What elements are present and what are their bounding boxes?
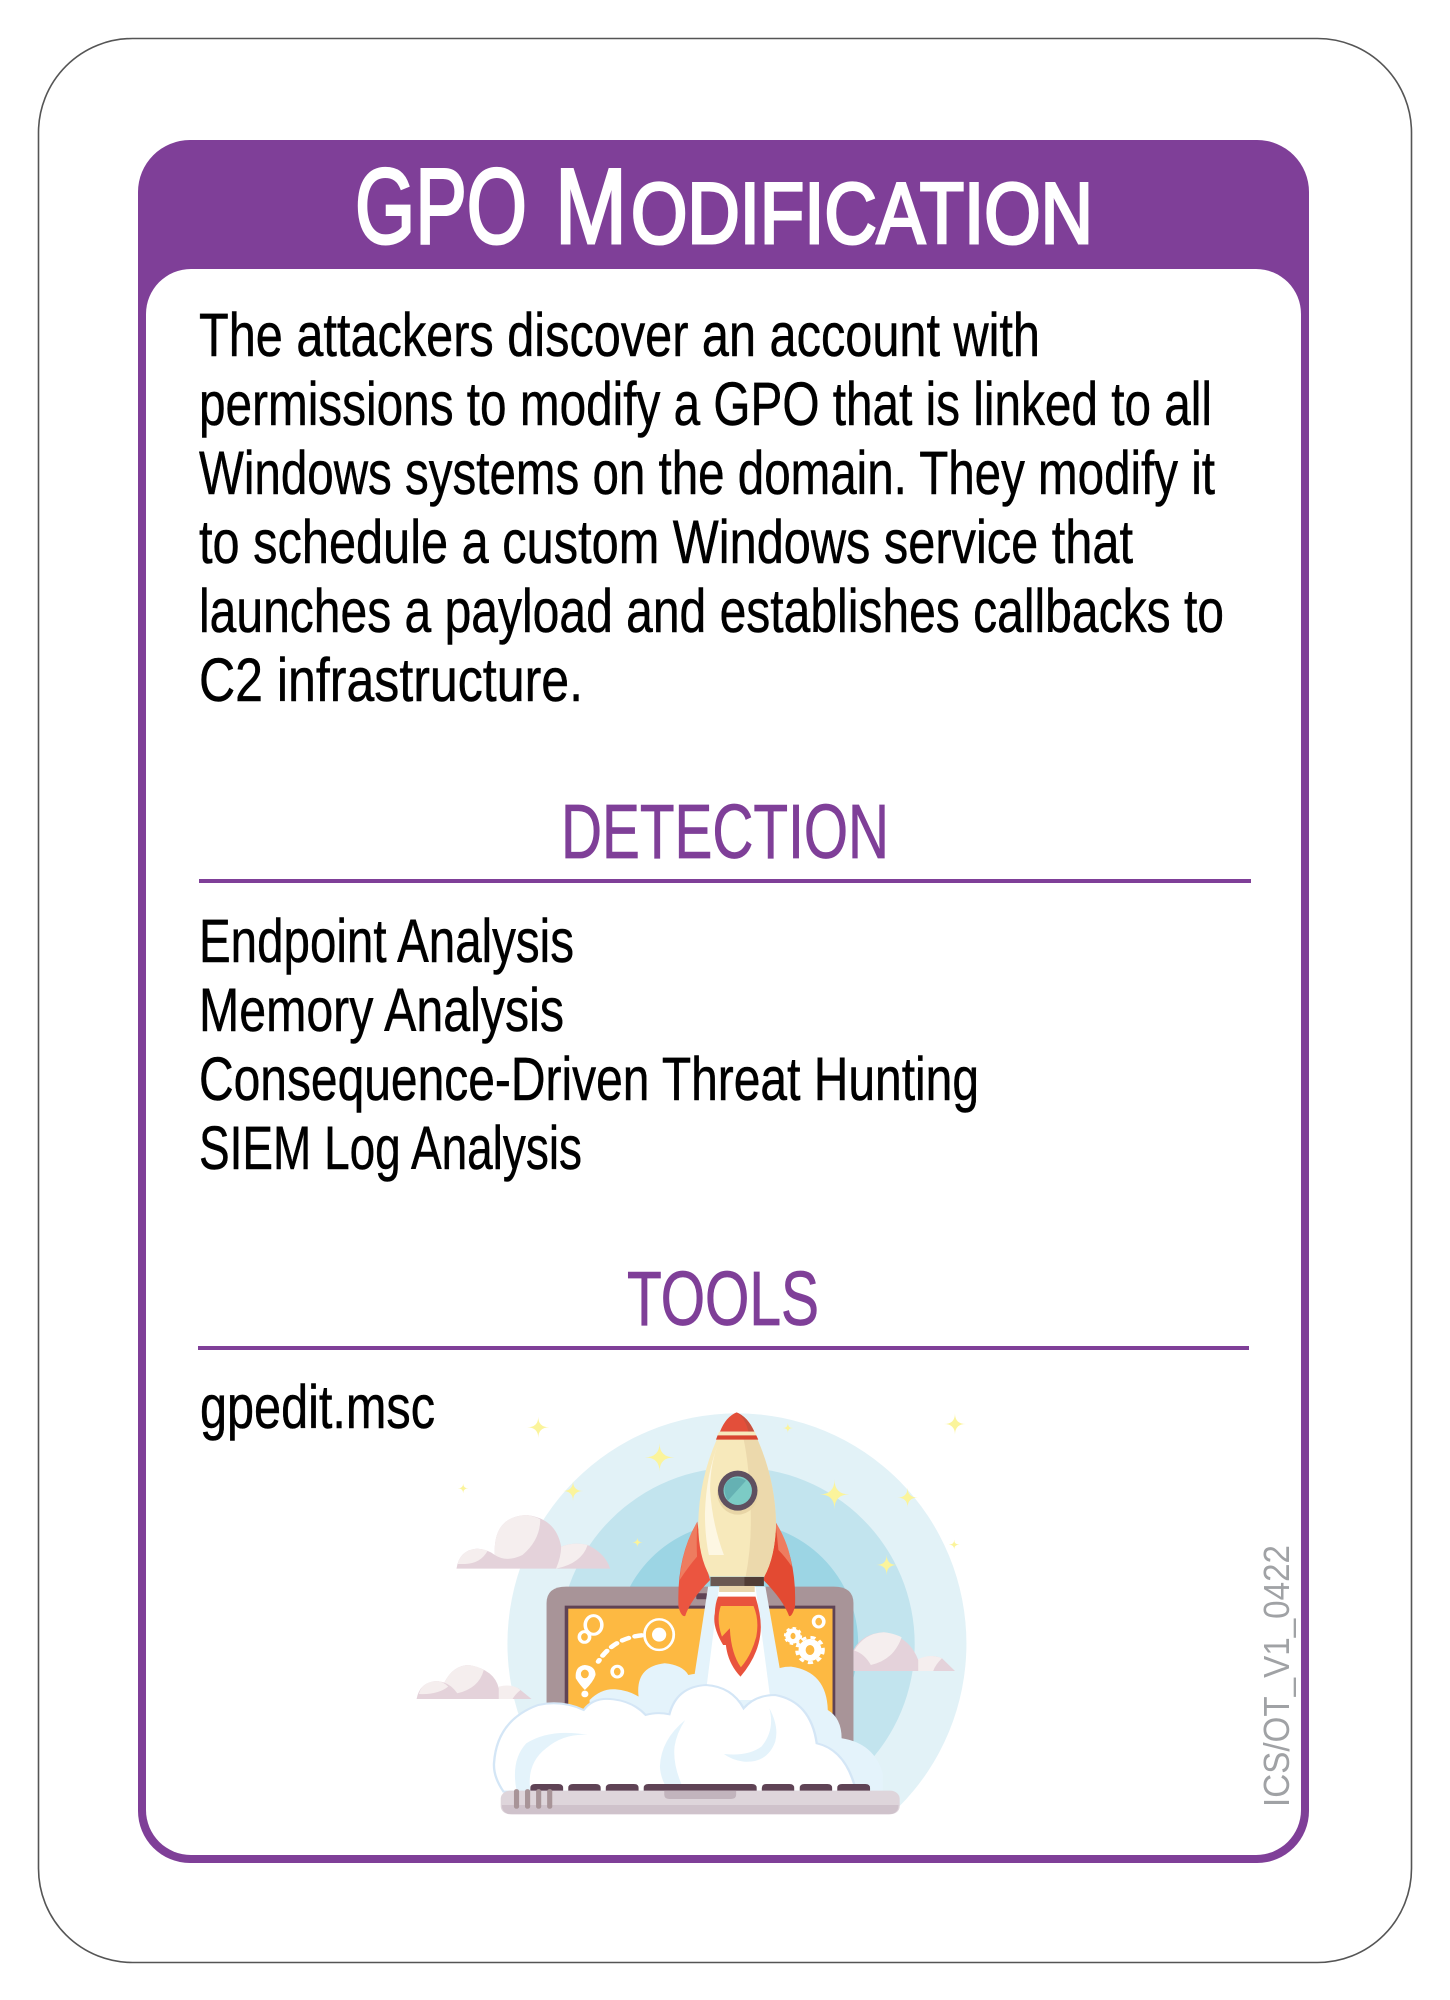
title: M xyxy=(555,146,627,266)
detection list: Endpoint Analysis xyxy=(199,907,574,975)
stars xyxy=(458,1413,966,1575)
description text xyxy=(199,301,1224,714)
purple frame xyxy=(138,140,1309,1863)
tools list: gpedit.msc xyxy=(200,1373,435,1441)
detection list: SIEM Log Analysis xyxy=(199,1114,582,1182)
detection list xyxy=(199,907,979,1182)
illustration: rocket launching from laptop xyxy=(416,1412,966,1814)
rocket xyxy=(678,1412,795,1616)
title: GPO xyxy=(355,146,527,266)
cloud upper left xyxy=(456,1515,610,1569)
laptop keyboard xyxy=(501,1784,900,1814)
background circles xyxy=(508,1414,966,1806)
cloud lower left xyxy=(417,1665,532,1699)
exhaust and back cloud xyxy=(590,1587,883,1793)
front cloud xyxy=(494,1685,856,1792)
description text: The attackers discover an account with xyxy=(199,301,1040,369)
detection list: Consequence-Driven Threat Hunting xyxy=(199,1045,979,1113)
description text: to schedule a custom Windows service that xyxy=(199,508,1133,576)
detection list: Memory Analysis xyxy=(199,976,564,1044)
detection heading: DETECTION xyxy=(561,789,889,875)
description text: C2 infrastructure. xyxy=(199,646,583,714)
title: ODIFICATION xyxy=(631,166,1093,262)
version code: ICS/OT_V1_0422 xyxy=(1256,1545,1297,1807)
cloud right xyxy=(853,1632,955,1671)
tools heading: TOOLS xyxy=(627,1256,819,1342)
white content panel xyxy=(146,269,1301,1855)
flame xyxy=(714,1597,761,1677)
screen icons xyxy=(576,1616,824,1697)
laptop xyxy=(547,1587,853,1797)
